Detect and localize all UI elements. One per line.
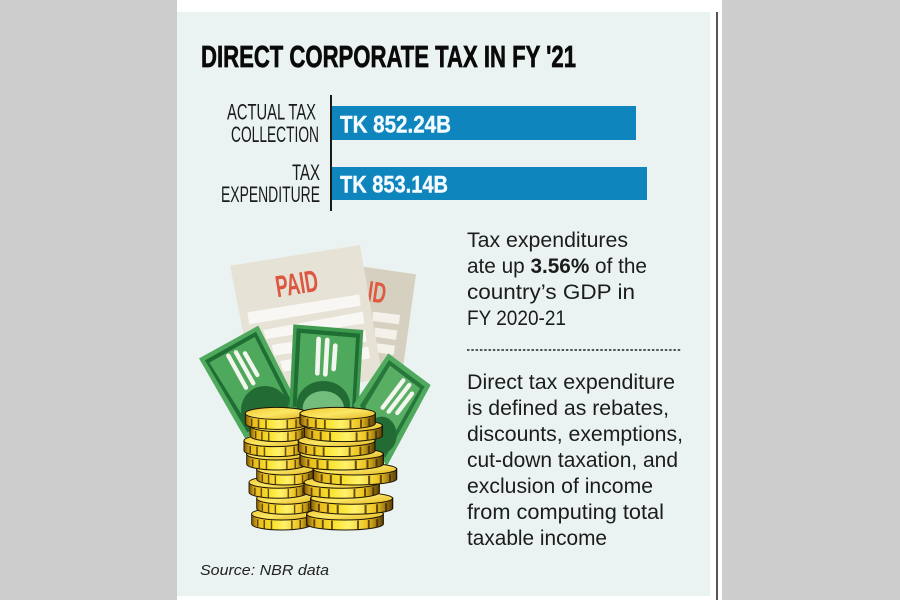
label: tax expenditure [221,160,320,207]
text block: GDP share [467,229,647,330]
bar: actual tax collection: TK 852.24B [340,112,451,138]
label: actual tax collection: COLLECTION [231,122,319,147]
chart axis [330,95,332,211]
text block: GDP share: FY 2020-21 [467,307,566,330]
label: actual tax collection: ACTUAL TAX [227,100,316,124]
text block: definition of direct tax expenditure: taxable income [467,527,607,550]
text block: definition of direct tax expenditure: cut-down taxation, and [467,449,678,472]
text block: definition of direct tax expenditure: is defined as rebates, [467,397,669,420]
back paper [363,267,416,378]
centre banknote [289,324,363,429]
page background: white sheet [177,0,722,600]
bar chart: tax collection versus expenditure [221,95,647,211]
right banknote [353,353,431,467]
text block: GDP share: ate up 3.56% of the [467,255,647,278]
dotted divider [467,349,682,351]
text block: definition of direct tax expenditure: Direct tax expenditure [467,371,675,394]
label: tax expenditure: TAX [292,160,320,185]
right coin stack [298,407,397,530]
label: actual tax collection [227,100,319,147]
source note: Source: NBR data [200,563,329,579]
panel: infographic background [177,12,710,596]
text block: GDP share: country’s GDP in [467,281,635,304]
back paper: ID [366,276,388,311]
left banknote [199,326,302,438]
right edge rule [716,12,718,600]
left coin stack [244,407,313,530]
illustration: paid bills, banknotes and gold coins [199,245,431,530]
title: DIRECT CORPORATE TAX IN FY '21 [201,39,576,74]
bar: tax expenditure [332,167,647,200]
text block: definition of direct tax expenditure: from computing total [467,501,664,524]
front paper [230,245,383,402]
front paper: PAID [273,264,321,305]
text block: definition of direct tax expenditure: discounts, exemptions, [467,423,683,446]
bar: tax expenditure: TK 853.14B [340,172,448,198]
label: tax expenditure: EXPENDITURE [221,182,320,207]
text block: definition of direct tax expenditure [467,371,683,550]
bar: actual tax collection [332,106,636,140]
text block: definition of direct tax expenditure: exclusion of income [467,475,653,498]
text block: GDP share: Tax expenditures [467,229,628,252]
